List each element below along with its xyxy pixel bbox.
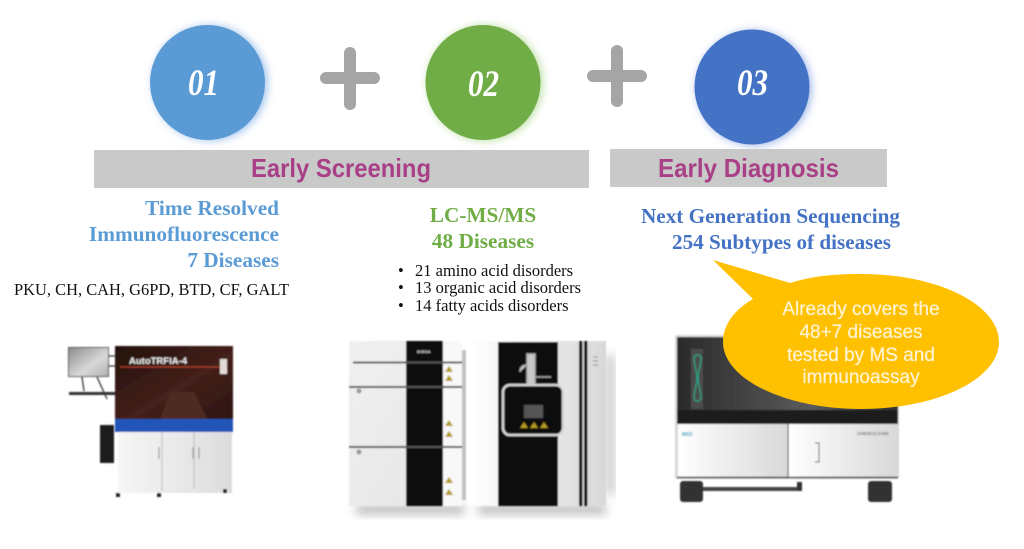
callout: 48+7 diseases [799, 322, 923, 343]
heading band: Early Diagnosis [610, 149, 887, 187]
machine: mass spectrometer unit [469, 341, 614, 514]
text block: next generation sequencing [641, 204, 900, 254]
machine: liquid chromatography unit [349, 341, 466, 514]
plus sign 2 [587, 45, 647, 107]
machine: DNBSEQ sequencer: MGI [682, 432, 693, 438]
circle 02: 02 [468, 64, 499, 105]
circle 02 [426, 25, 543, 141]
text block: time resolved immunofluorescence [89, 196, 279, 272]
list: disorder categories: 21 amino acid disorders [415, 261, 573, 280]
text block: time resolved immunofluorescence: Time Resolved [145, 196, 279, 220]
circle 03 [694, 30, 812, 146]
list: disorder categories: 13 organic acid disorders [415, 278, 581, 297]
callout [713, 260, 999, 409]
machine: liquid chromatography unit: EXESA [417, 349, 431, 354]
list: disorder categories: • [398, 278, 404, 297]
list: disorder categories: • [398, 261, 404, 280]
heading band: Early Diagnosis: Early Diagnosis [658, 153, 839, 183]
text block: disease abbreviations: PKU, CH, CAH, G6PD, BTD, CF, GALT [14, 280, 289, 299]
text block: LC-MS/MS: 48 Diseases [432, 229, 534, 253]
callout: tested by MS and [787, 345, 935, 366]
list: disorder categories [398, 261, 581, 315]
list: disorder categories: 14 fatty acids disorders [415, 296, 569, 315]
circle 01: 01 [188, 63, 219, 104]
text block: time resolved immunofluorescence: Immunofluorescence [89, 222, 279, 246]
callout: Already covers the [782, 299, 940, 320]
circle 03: 03 [737, 63, 768, 104]
text block: time resolved immunofluorescence: 7 Diseases [187, 248, 279, 272]
list: disorder categories: • [398, 296, 404, 315]
plus sign 1 [320, 47, 380, 110]
callout: immunoassay [802, 367, 920, 388]
machine: AutoTRFIA-4 immunoassay analyser [68, 346, 233, 497]
text block: LC-MS/MS [430, 203, 536, 253]
heading band: Early Screening: Early Screening [251, 153, 431, 183]
machine: DNBSEQ sequencer [675, 335, 899, 502]
text block: next generation sequencing: 254 Subtypes of diseases [672, 230, 891, 254]
machine: AutoTRFIA-4 immunoassay analyser: AutoTRFIA-4 [129, 356, 188, 367]
text block: LC-MS/MS: LC-MS/MS [430, 203, 536, 227]
circle 01 [150, 25, 268, 141]
heading band: Early Screening [94, 150, 589, 188]
text block: next generation sequencing: Next Generation Sequencing [641, 204, 900, 228]
machine: DNBSEQ sequencer: DNBSEQ-G400 [857, 431, 889, 436]
